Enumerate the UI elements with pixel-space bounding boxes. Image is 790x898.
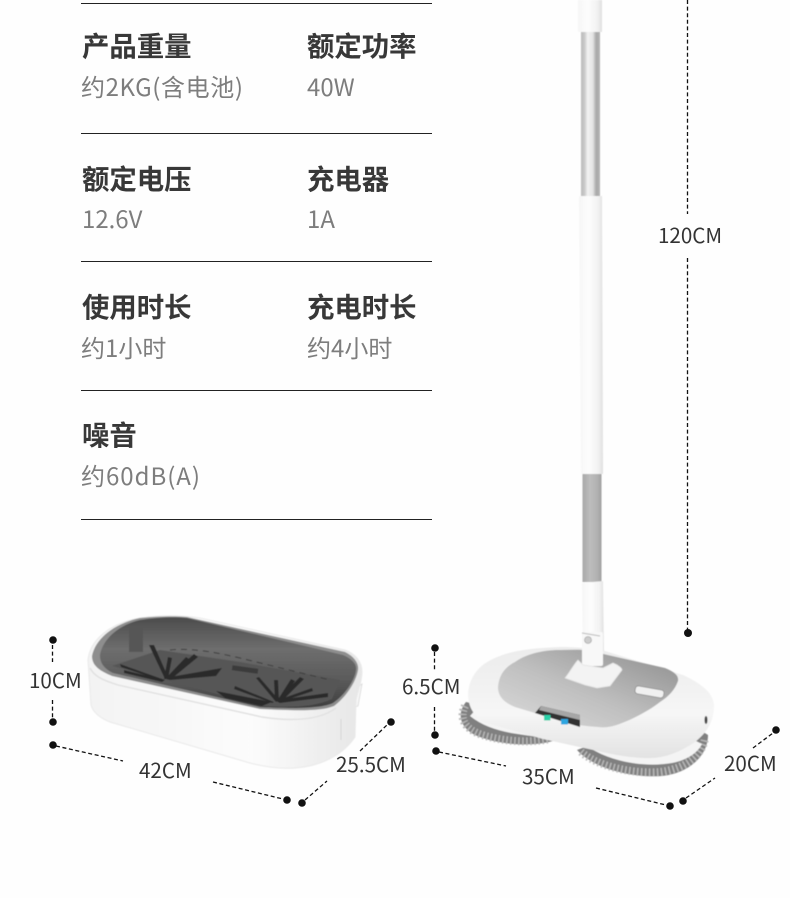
spec: rated voltage bbox=[82, 164, 192, 235]
icon: mop height dimension 6.5CM: 6.5CM bbox=[402, 670, 460, 700]
left mop pad bbox=[461, 702, 553, 744]
pad backing plate bbox=[590, 738, 702, 765]
spec: product weight: 约2KG(含电池) bbox=[81, 68, 243, 103]
tray dashed rim bbox=[170, 649, 330, 680]
mop display bbox=[535, 706, 580, 727]
tray inner floor bbox=[112, 650, 340, 707]
silver panel bbox=[498, 650, 678, 727]
spec: charge time: 约4小时 bbox=[307, 329, 392, 364]
spec: noise: 约60dB(A) bbox=[81, 457, 200, 492]
charging port bbox=[704, 716, 708, 724]
spec: rated power: 40W bbox=[307, 68, 355, 103]
right mop pad bbox=[577, 730, 708, 776]
spec: noise bbox=[81, 420, 200, 492]
spec: run time bbox=[81, 292, 192, 364]
spec: noise: 噪音 bbox=[82, 420, 137, 451]
panel: specification table bbox=[81, 4, 432, 520]
icon: tray width dimension 25.5CM bbox=[298, 718, 406, 807]
pole collar bbox=[565, 660, 622, 688]
tray star left bbox=[120, 645, 222, 682]
spec: rated power bbox=[307, 31, 417, 103]
tray star right bbox=[216, 677, 328, 706]
spec: run time: 使用时长 bbox=[82, 292, 192, 323]
icon: mop length dimension 35CM: 35CM bbox=[522, 760, 575, 790]
icon: mop width dimension 20CM: 20CM bbox=[724, 747, 777, 777]
icon: tray height dimension 10CM bbox=[29, 636, 82, 726]
spec: product weight bbox=[81, 31, 243, 103]
icon: tray length dimension 42CM: 42CM bbox=[139, 754, 192, 784]
icon: tray height dimension 10CM: 10CM bbox=[29, 664, 82, 694]
tray dark interior bbox=[100, 617, 356, 708]
icon: height dimension 120CM: 120CM bbox=[658, 219, 722, 249]
spec: rated voltage: 12.6V bbox=[82, 200, 143, 235]
spec: charge time bbox=[307, 292, 417, 364]
icon: mop length dimension 35CM bbox=[432, 747, 674, 810]
tray lip bbox=[92, 616, 358, 710]
pole joint bbox=[582, 632, 603, 666]
spec: run time: 约1小时 bbox=[81, 329, 166, 364]
spec: charger: 充电器 bbox=[307, 164, 390, 195]
spec: charger: 1A bbox=[307, 200, 335, 235]
mop body bbox=[468, 647, 714, 758]
tray body bbox=[88, 616, 362, 768]
icon: storage tray bbox=[88, 616, 362, 768]
spec: charger bbox=[307, 164, 390, 235]
icon: mop pole bbox=[578, 0, 604, 660]
icon: mop width dimension 20CM bbox=[679, 726, 780, 805]
icon: tray length dimension 42CM bbox=[49, 741, 291, 804]
icon: height dimension 120CM bbox=[658, 0, 722, 637]
icon: mop height dimension 6.5CM bbox=[402, 644, 460, 739]
mop button bbox=[635, 685, 664, 698]
spec: product weight: 产品重量 bbox=[82, 31, 192, 62]
tray handle bbox=[343, 684, 362, 711]
icon: tray width dimension 25.5CM: 25.5CM bbox=[336, 748, 406, 778]
spec: rated voltage: 额定电压 bbox=[82, 164, 192, 195]
spec: rated power: 额定功率 bbox=[307, 31, 417, 62]
spec: charge time: 充电时长 bbox=[307, 292, 417, 323]
icon: mop head bbox=[461, 632, 714, 776]
